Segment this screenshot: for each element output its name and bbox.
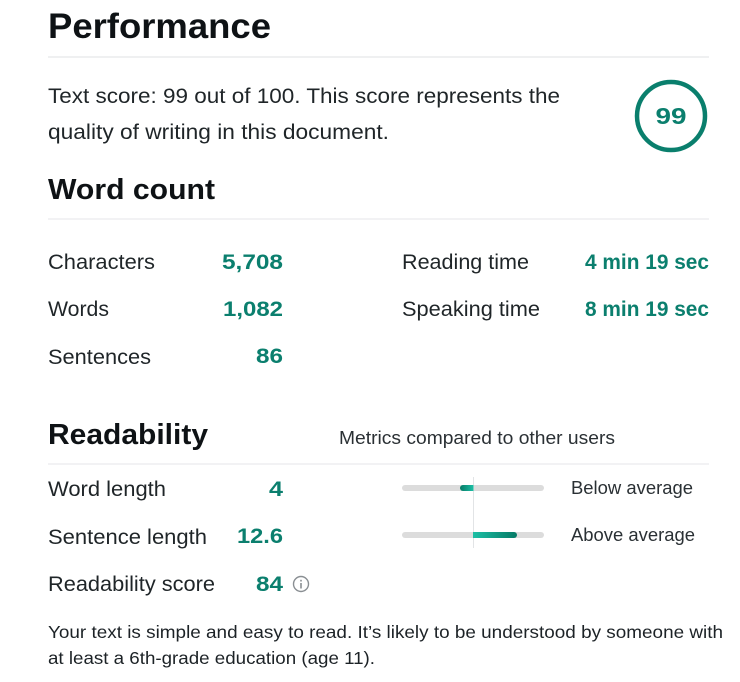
text block: readability summary bbox=[48, 622, 723, 668]
labels: bar comparison results: Above average bbox=[571, 525, 695, 545]
text block: score description: quality of writing in this document. bbox=[48, 121, 389, 144]
stats: word count left column: Sentences bbox=[48, 346, 151, 369]
stats: readability: Readability score bbox=[48, 573, 215, 596]
caption: metrics compared: Metrics compared to other users bbox=[339, 428, 615, 448]
heading: Word count: Word count bbox=[48, 174, 215, 206]
stats: readability: 84 bbox=[256, 573, 283, 596]
score circle: 99: 99 bbox=[656, 103, 686, 129]
text block: readability summary: at least a 6th-grade education (age 11). bbox=[48, 648, 375, 668]
stats: word count right column: 8 min 19 sec bbox=[585, 298, 709, 321]
stats: word count right column: 4 min 19 sec bbox=[585, 251, 709, 274]
icon: info bbox=[294, 576, 308, 592]
stats: word count right column: Reading time bbox=[402, 251, 529, 274]
labels: bar comparison results bbox=[571, 478, 695, 545]
stats: word count left column: Words bbox=[48, 298, 109, 321]
stats: readability: 12.6 bbox=[237, 525, 283, 548]
text block: score description bbox=[48, 85, 560, 144]
stats: word count right column: Speaking time bbox=[402, 298, 540, 321]
text block: score description: Text score: 99 out of 100. This score represents the bbox=[48, 85, 560, 108]
stats: readability: Word length bbox=[48, 478, 166, 501]
stats: readability: 4 bbox=[269, 478, 283, 501]
score circle: 99 bbox=[637, 82, 705, 150]
stats: word count left column: 1,082 bbox=[223, 298, 283, 321]
title: Performance: Performance bbox=[48, 7, 271, 46]
labels: bar comparison results: Below average bbox=[571, 478, 693, 498]
stats: readability: Sentence length bbox=[48, 526, 207, 549]
stats: readability bbox=[48, 478, 283, 596]
chart: metric comparison bars bbox=[402, 477, 544, 548]
stats: word count left column: 5,708 bbox=[222, 251, 283, 274]
text block: readability summary: Your text is simple and easy to read. It’s likely to be understood by someone with bbox=[48, 622, 723, 642]
heading: Readability: Readability bbox=[48, 419, 208, 451]
stats: word count right column bbox=[402, 251, 709, 321]
stats: word count left column bbox=[48, 251, 283, 369]
stats: word count left column: Characters bbox=[48, 251, 155, 274]
stats: word count left column: 86 bbox=[256, 345, 283, 368]
